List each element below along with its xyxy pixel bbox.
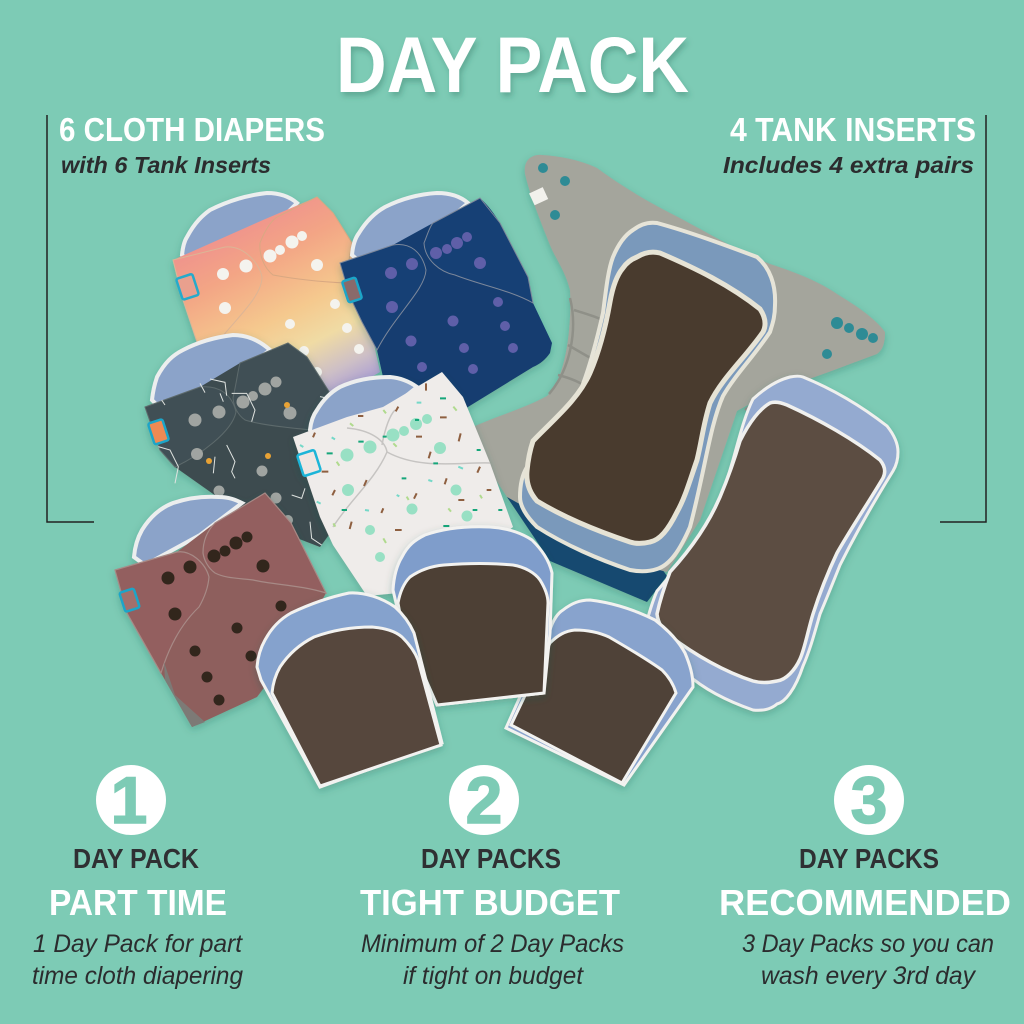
diaper: slate constellation [145,335,340,547]
column 1: part time: PART TIME [49,882,227,923]
right tank insert [647,376,898,710]
right heading: tank inserts [723,111,976,178]
number badge 2: 2 [466,763,502,837]
number badge 1 [96,763,166,837]
number badge 2 [449,763,519,837]
column 1: part time: DAY PACK [73,843,199,874]
left heading: cloth diapers [59,111,325,178]
insert: charcoal front [527,252,765,544]
right bracket [940,115,986,522]
number badge 3 [834,763,904,837]
column 3: recommended: wash every 3rd day [761,962,976,990]
size tag [297,450,321,476]
diaper tag [529,187,548,205]
column 1: part time: 1 Day Pack for part [33,930,243,958]
column 3: recommended: RECOMMENDED [719,882,1011,923]
insert: blue layers [520,223,775,571]
title: DAY PACK [336,20,689,109]
column 1: part time [32,763,243,990]
diaper: mauve [115,493,326,727]
large grey diaper with tank insert [475,155,885,602]
size tag [176,274,199,300]
left heading: cloth diapers: with 6 Tank Inserts [61,152,271,178]
size tag [342,277,362,303]
number badge 1: 1 [111,763,147,837]
small insert center [393,527,552,705]
right heading: tank inserts: 4 TANK INSERTS [730,111,976,148]
number badge 3: 3 [851,763,887,837]
left bracket [47,115,94,522]
column 2: tight budget [360,763,624,990]
small insert left [257,593,442,787]
left heading: cloth diapers: 6 CLOTH DIAPERS [59,111,325,148]
diaper: white sprinkles [293,372,513,596]
right heading: tank inserts: Includes 4 extra pairs [723,152,974,178]
column 3: recommended: 3 Day Packs so you can [742,930,994,958]
size tag [119,588,140,612]
diaper: pink gradient [173,193,380,395]
column 3: recommended [719,763,1011,990]
small insert right [506,600,693,785]
column 2: tight budget: DAY PACKS [421,843,561,874]
column 2: tight budget: Minimum of 2 Day Packs [361,930,624,958]
diaper: navy [340,193,552,410]
column 2: tight budget: TIGHT BUDGET [360,882,620,923]
column 1: part time: time cloth diapering [32,962,243,990]
size tag [148,419,169,445]
column 2: tight budget: if tight on budget [403,962,584,990]
column 3: recommended: DAY PACKS [799,843,939,874]
